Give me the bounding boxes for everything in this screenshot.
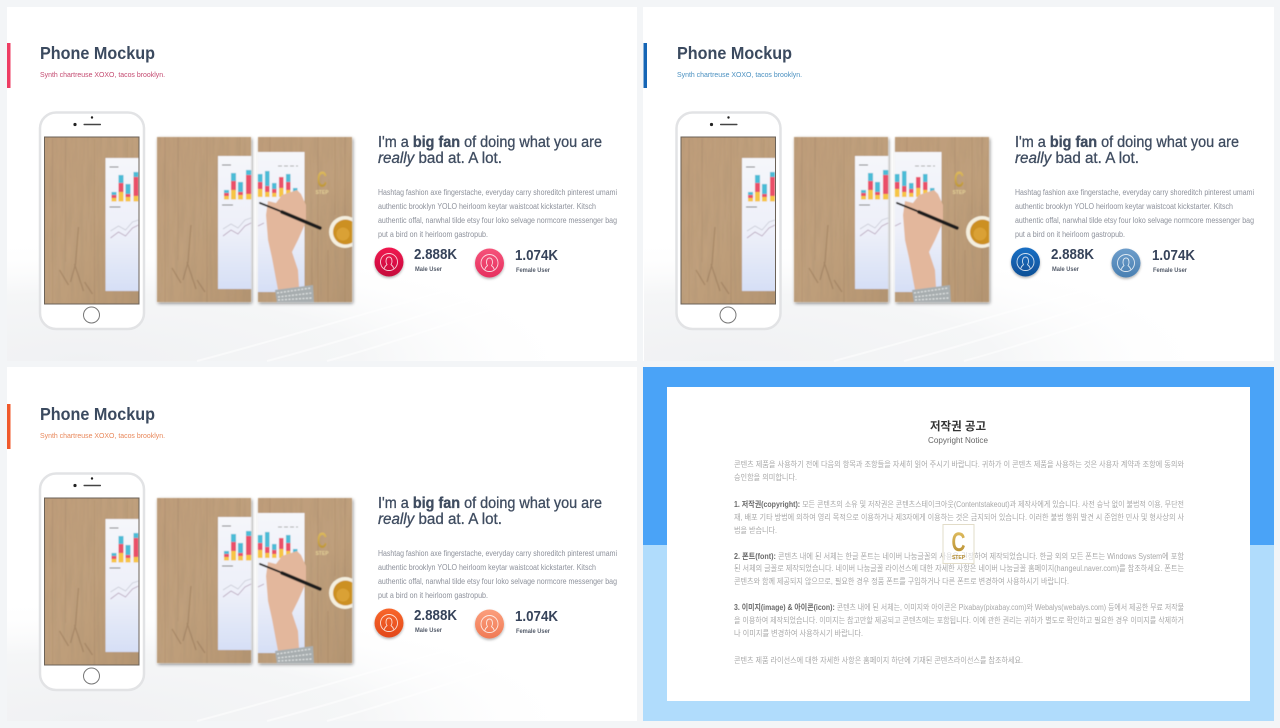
panel: phone mockup slide, red theme [7,7,637,361]
body text: Hashtag fashion axe fingerstache, everyday carry shoreditch pinterest umami [378,188,617,197]
section 2: font: 된 서체의 글꼴로 제작되었습니다. 네이버 나눔글꼴 라이선스에 대한 자세한 사항은 네이버 나눔글꼴 홈페이지(hangeul.naver.com)를 참조하세요. 폰트는 [734,563,1184,573]
heading: I'm a big fan of doing what you are [378,134,602,151]
section 1: copyright: 재, 배포 기타 방법에 의하여 영리 목적으로 이용하거나 제3자에게 이용하는 것은 금지되어 있습니다. 이러한 불법 행위 발견 시 준엄한 민사 및 형사상의 사 [734,512,1185,522]
heading: I'm a big fan of doing what you are [1015,134,1239,151]
section 3: image and icon: 나 이미지를 변경하여 사용하시기 바랍니다. [734,628,863,638]
split photo of chart on wooden desk [150,491,361,671]
notice title: 저작권 공고 [930,419,986,433]
title: Phone Mockup [40,404,155,424]
heading: really bad at. A lot. [378,150,502,167]
phone mockup [674,112,780,329]
stat: male user [1011,247,1094,276]
body text: put a bird on it heirloom gastropub. [378,230,488,239]
body text [378,188,617,239]
icon: gold watermark: STEP [952,555,966,561]
body text: Hashtag fashion axe fingerstache, everyday carry shoreditch pinterest umami [378,549,617,558]
stat: male user: Male User [1052,266,1080,273]
body text: authentic brooklyn YOLO heirloom keytar waistcoat kickstarter. Kitsch [378,202,596,211]
heading: I'm a big fan of doing what you are [378,495,602,512]
section 3: image and icon: 을 이용하여 제작되었습니다. 이미지는 참고만할 제공되고 콘텐츠에는 포함됩니다. 이에 관한 권리는 귀하가 별도로 확인하고 필요한 경우 이미지를 삭제하거 [734,615,1184,625]
phone mockup [38,112,144,329]
section 2: font: 2. 폰트(font): 콘텐츠 내에 된 서체는 한글 폰트는 네이버 나눔글꼴의 사용을 권장하여 제작되었습니다. 한글 외의 모든 폰트는 Windows System에 포함 [734,551,1185,561]
stat: male user [374,608,457,638]
notice subtitle: Copyright Notice [928,435,988,445]
section 2: font: 콘텐츠와 함께 제공되지 않으므로, 필요한 경우 정품 폰트를 구입하거나 다른 폰트로 변경하여 사용하시기 바랍니다. [734,576,1069,586]
stat: female user [1112,248,1195,278]
stat: male user: Male User [415,266,443,273]
section 1: copyright [734,499,1185,535]
heading: really bad at. A lot. [1015,150,1139,167]
panel: phone mockup slide, orange theme [7,367,637,721]
body text [378,549,617,600]
body text [1015,188,1254,239]
title: Phone Mockup [40,43,155,63]
stat: female user: 1.074K [515,248,558,264]
icon: gold watermark [943,524,974,564]
body text: authentic brooklyn YOLO heirloom keytar waistcoat kickstarter. Kitsch [1015,202,1233,211]
split photo of chart on wooden desk [150,130,361,310]
stat: female user [475,248,558,278]
subtitle: Synth chartreuse XOXO, tacos brooklyn. [40,431,165,440]
accent bar [644,43,647,88]
heading [378,134,602,167]
stat: female user: 1.074K [1152,248,1195,264]
body text: authentic offal, narwhal tilde etsy four loko selvage normcore messenger bag [378,577,617,586]
body text: authentic offal, narwhal tilde etsy four loko selvage normcore messenger bag [1015,216,1254,225]
heading [1015,134,1239,167]
body text: put a bird on it heirloom gastropub. [1015,230,1125,239]
panel: phone mockup slide, blue theme [643,7,1274,361]
stat: female user: Female User [1153,267,1188,274]
heading [378,495,602,528]
icon: gold watermark: C [952,527,966,557]
stat: male user [374,247,457,276]
body text: authentic offal, narwhal tilde etsy four loko selvage normcore messenger bag [378,216,617,225]
closing line: 콘텐츠 제품 라이선스에 대한 자세한 사항은 홈페이지 하단에 기재된 콘텐츠라이선스를 참조하세요. [734,655,1023,665]
section 3: image and icon: 3. 이미지(image) & 아이콘(icon): 콘텐츠 내에 된 서체는, 이미지와 아이콘은 Pixabay(pixabay.com)와 Webalys(webalys.com) 등에서 제공한 무료 저작물 [734,602,1184,612]
stat: female user [475,609,558,638]
stat: female user: Female User [516,267,551,274]
stat: male user: Male User [415,627,443,634]
body text: put a bird on it heirloom gastropub. [378,591,488,600]
stat: female user: Female User [516,628,551,635]
stat: female user: 1.074K [515,609,558,625]
section 2: font [734,551,1185,586]
notice intro: 승인함을 의미합니다. [734,472,797,482]
section 1: copyright: 법을 받습니다. [734,525,777,535]
split photo of chart on wooden desk [787,130,998,310]
section 3: image and icon [734,602,1184,638]
accent bar [7,404,10,449]
stat: male user: 2.888K [1051,247,1094,263]
section 1: copyright: 1. 저작권(copyright): 모든 콘텐츠의 소유 및 저작권은 콘텐츠스테이크아웃(Contentstakeout)과 제작사에게 있습니다. 사전 승낙 없이 불법적 이용, 무단전 [734,499,1184,509]
stat: male user: 2.888K [414,608,457,624]
heading: really bad at. A lot. [378,511,502,528]
phone mockup [38,474,144,690]
body text: authentic brooklyn YOLO heirloom keytar waistcoat kickstarter. Kitsch [378,563,596,572]
notice intro: 콘텐츠 제품을 사용하기 전에 다음의 항목과 조항들을 자세히 읽어 주시기 바랍니다. 귀하가 이 콘텐츠 제품을 사용하는 것은 사용자 계약과 조항에 동의와 [734,459,1185,469]
accent bar [7,43,10,88]
panel: copyright notice [643,367,1274,721]
stat: male user: 2.888K [414,247,457,263]
title: Phone Mockup [677,43,792,63]
notice intro [734,459,1185,482]
subtitle: Synth chartreuse XOXO, tacos brooklyn. [677,70,802,79]
subtitle: Synth chartreuse XOXO, tacos brooklyn. [40,70,165,79]
